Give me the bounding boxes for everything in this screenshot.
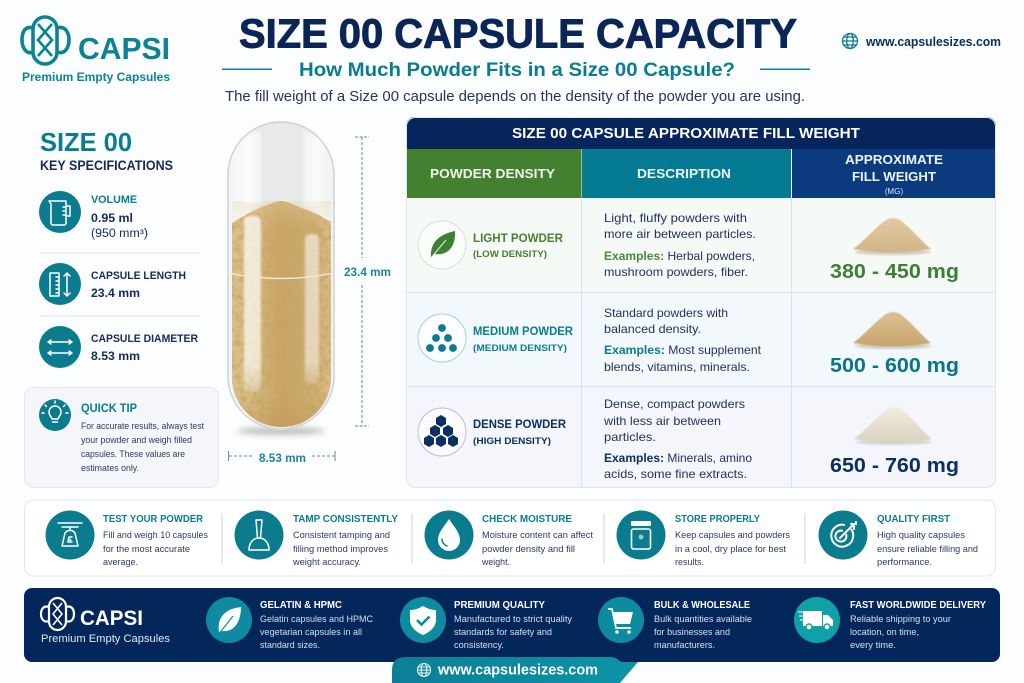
spec: capsule length (39, 263, 186, 305)
table title: SIZE 00 CAPSULE APPROXIMATE FILL WEIGHT (512, 126, 860, 142)
row: dense powder: particles. (604, 430, 656, 444)
feature: gelatin and hpmc (206, 597, 373, 651)
tip: check moisture (424, 510, 593, 568)
callout: quick tip: QUICK TIP (81, 403, 137, 415)
column header: approximate fill weight: APPROXIMATE (845, 153, 943, 167)
row: medium powder: blends, vitamins, minerals. (604, 360, 750, 374)
heading: size 00: SIZE 00 (40, 127, 132, 157)
footer logo: Premium Empty Capsules (41, 633, 171, 645)
feature: premium quality: standards for safety and (454, 627, 552, 638)
feature: premium quality (400, 597, 572, 651)
row: light powder: 380 - 450 mg (830, 260, 959, 283)
tip: test your powder: Fill and weigh 10 capsules (103, 530, 208, 541)
row: light powder: LIGHT POWDER (473, 233, 564, 245)
panel: footer band (24, 588, 1000, 662)
callout: quick tip (24, 388, 218, 488)
row: medium powder: 500 - 600 mg (830, 354, 959, 377)
tip: check moisture: CHECK MOISTURE (482, 514, 572, 525)
row: dense powder: DENSE POWDER (473, 419, 567, 431)
row: light powder: Light, fluffy powders with (604, 211, 747, 225)
dimension arrow: capsule diameter: 8.53 mm (259, 453, 306, 465)
feature: fast worldwide delivery: Reliable shipping to your (850, 614, 951, 625)
column header: powder density: POWDER DENSITY (430, 167, 556, 181)
row: light powder: (LOW DENSITY) (473, 249, 547, 260)
tip: store properly: in a cool, dry place for best (675, 544, 786, 555)
tip: store properly: STORE PROPERLY (675, 514, 760, 525)
column header: approximate fill weight: FILL WEIGHT (852, 170, 936, 184)
website tab bottom (392, 657, 638, 683)
tip: check moisture: Moisture content can affect (482, 530, 593, 541)
tip: store properly: results. (675, 557, 704, 568)
icon: capsule knot logo (22, 17, 69, 64)
row: dense powder: 650 - 760 mg (830, 454, 959, 477)
feature: fast worldwide delivery: location, on time, (850, 627, 919, 638)
row: dense powder (418, 397, 959, 481)
row: light powder: mushroom powders, fiber. (604, 265, 748, 279)
tip: store properly (616, 510, 790, 568)
spec: capsule diameter (39, 326, 198, 368)
callout: quick tip: your powder and weigh filled (81, 435, 192, 445)
row: dense powder: Dense, compact powders (604, 397, 745, 411)
tip: store properly: Keep capsules and powders (675, 530, 790, 541)
footer logo (41, 598, 171, 645)
tip: quality first: QUALITY FIRST (877, 514, 950, 525)
spec: capsule diameter: CAPSULE DIAMETER (91, 333, 198, 345)
row: medium powder (418, 306, 959, 377)
icon: globe (418, 664, 430, 676)
tip: tamp consistently: filling method improves (293, 544, 388, 555)
feature: premium quality: PREMIUM QUALITY (454, 600, 545, 611)
feature: fast worldwide delivery: FAST WORLDWIDE DELIVERY (850, 600, 986, 611)
column header: approximate fill weight (845, 153, 943, 196)
row: dense powder: acids, some fine extracts. (604, 467, 747, 481)
feature: premium quality: consistency. (454, 640, 504, 651)
tip: quality first: ensure reliable filling and (877, 544, 978, 555)
spec: capsule diameter: 8.53 mm (91, 349, 140, 363)
feature: gelatin and hpmc: standard sizes. (260, 640, 320, 651)
feature: fast worldwide delivery: every time. (850, 640, 896, 651)
feature: premium quality: Manufactured to strict quality (454, 614, 572, 625)
tip: tamp consistently: Consistent tamping and (293, 530, 390, 541)
icon: dots (418, 314, 466, 362)
tip: test your powder: for the most accurate (103, 544, 190, 555)
tip: quality first: performance. (877, 557, 932, 568)
row: dense powder: (HIGH DENSITY) (473, 436, 551, 447)
callout: quick tip: For accurate results, always test (81, 421, 204, 431)
tip: tamp consistently (234, 510, 398, 568)
icon: leaf (418, 221, 466, 269)
feature: bulk and wholesale: manufacturers. (654, 640, 715, 651)
dimension arrow: capsule length (344, 137, 391, 426)
title: SIZE 00 CAPSULE CAPACITY (239, 10, 797, 56)
row: dense powder: Examples: Minerals, amino (604, 451, 752, 465)
callout: quick tip: estimates only. (81, 463, 139, 473)
tip: quality first: High quality capsules (877, 530, 965, 541)
row: light powder: Examples: Herbal powders, (604, 249, 755, 263)
row: medium powder: balanced density. (604, 322, 701, 336)
icon: light bulb (39, 399, 71, 431)
logo: CAPSI: Premium Empty Capsules (22, 70, 170, 84)
tip: tamp consistently: weight accuracy. (292, 557, 361, 568)
website link top: www.capsulesizes.com (865, 35, 1001, 49)
feature: bulk and wholesale: BULK & WHOLESALE (654, 600, 750, 611)
row: light powder (418, 211, 959, 283)
row: light powder: more air between particles. (604, 227, 756, 241)
column header: description: DESCRIPTION (637, 167, 731, 181)
subtitle: How Much Powder Fits in a Size 00 Capsule? (299, 59, 735, 81)
panel: key specifications (39, 127, 200, 368)
logo: CAPSI: CAPSI (78, 31, 170, 66)
row: medium powder: MEDIUM POWDER (473, 326, 574, 338)
feature: fast worldwide delivery (794, 597, 986, 651)
callout: quick tip: capsules. These values are (81, 449, 185, 459)
tip: tamp consistently: TAMP CONSISTENTLY (293, 514, 398, 525)
tip: check moisture: weight. (481, 557, 510, 568)
tip: check moisture: powder density and fill (482, 544, 575, 555)
dimension arrow: capsule diameter (228, 451, 335, 465)
powder pile: dense (854, 407, 932, 445)
feature: bulk and wholesale: for businesses and (654, 627, 730, 638)
spec: volume: VOLUME (91, 194, 137, 206)
icon: hexagons (418, 408, 466, 456)
icon: globe (842, 34, 858, 48)
panel: fill weight table (406, 117, 996, 488)
spec: capsule length: CAPSULE LENGTH (91, 270, 186, 282)
feature: gelatin and hpmc: Gelatin capsules and HPMC (260, 614, 373, 625)
dimension arrow: capsule length: 23.4 mm (344, 267, 391, 279)
spec: volume: (950 mm³) (91, 228, 148, 240)
website tab bottom: www.capsulesizes.com (437, 662, 598, 678)
panel: tips strip (24, 500, 996, 576)
tip: test your powder (46, 510, 208, 568)
spec: volume (39, 191, 148, 240)
row: medium powder: (MEDIUM DENSITY) (473, 343, 567, 354)
capsule illustration (227, 121, 335, 435)
spec: volume: 0.95 ml (91, 211, 133, 225)
tip: test your powder: average. (103, 557, 138, 568)
footer logo: CAPSI (80, 607, 143, 630)
powder pile: medium (853, 312, 931, 349)
row: medium powder: Examples: Most supplement (604, 343, 762, 357)
feature: bulk and wholesale: Bulk quantities available (654, 614, 752, 625)
column header: approximate fill weight: (MG) (885, 187, 903, 196)
intro sentence: The fill weight of a Size 00 capsule depends on the density of the powder you are using. (225, 89, 805, 105)
tip: test your powder: TEST YOUR POWDER (103, 514, 204, 525)
logo: CAPSI (22, 17, 170, 84)
spec: capsule length: 23.4 mm (91, 286, 140, 300)
feature: bulk and wholesale (598, 597, 752, 651)
heading: key specifications: KEY SPECIFICATIONS (40, 158, 173, 173)
feature: gelatin and hpmc: GELATIN & HPMC (260, 600, 342, 611)
row: medium powder: Standard powders with (604, 306, 728, 320)
tip: quality first (818, 510, 978, 568)
feature: gelatin and hpmc: vegetarian capsules in all (260, 627, 362, 638)
powder pile: light (853, 218, 931, 255)
row: dense powder: with less air between (603, 414, 721, 428)
